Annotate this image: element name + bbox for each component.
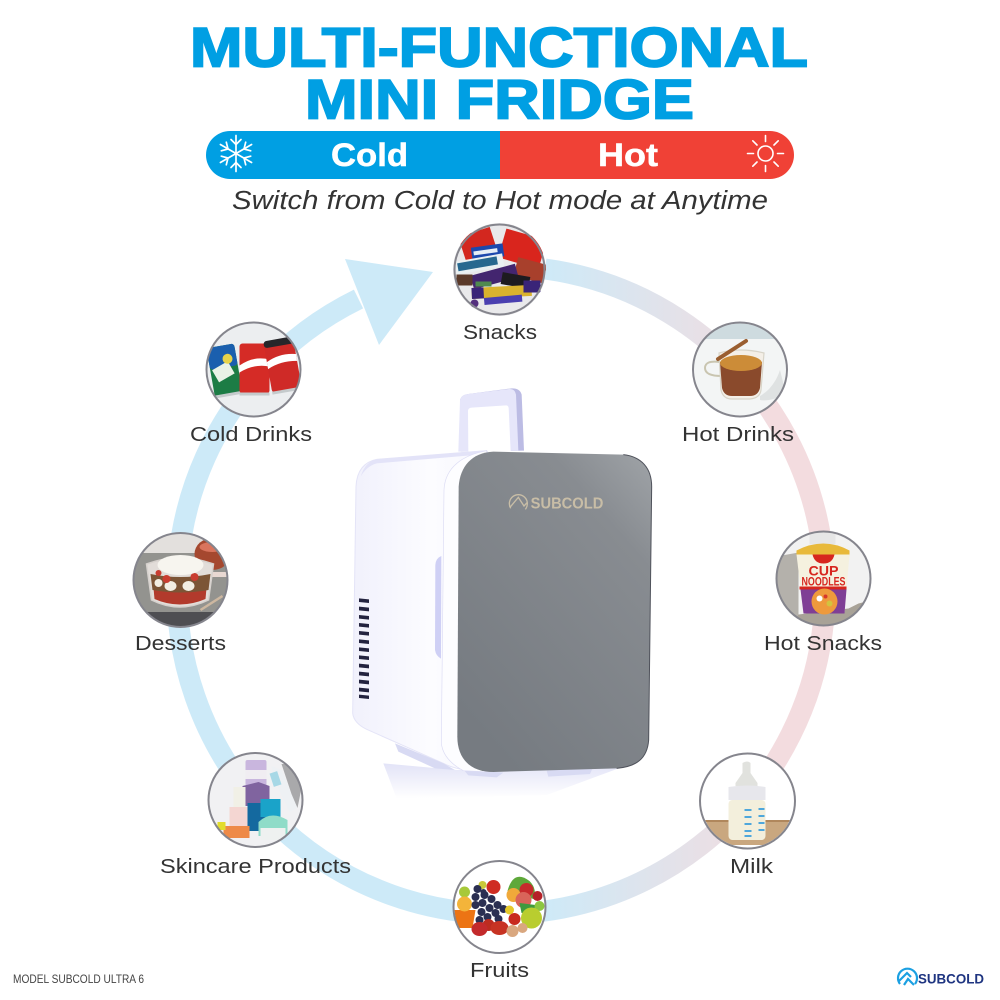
item: fruits [452,860,546,982]
skincare photo [208,753,302,847]
subtitle: Switch from Cold to Hot mode at Anytime [232,187,768,215]
desserts ring [134,533,228,627]
snacks photo [453,223,547,316]
hot snacks photo [776,532,870,626]
item: snacks [453,223,547,344]
brand name: SUBCOLD [918,970,984,986]
mode switch pill [206,131,794,179]
hot snacks photo: CUP [809,562,838,578]
fruits ring [454,861,546,953]
title: MULTI-FUNCTIONAL [190,16,808,78]
title: MINI FRIDGE [305,68,694,130]
hot snacks label: Hot Snacks [764,633,882,655]
cold drinks ring [206,322,300,416]
hot snacks photo: NOODLES [802,574,846,588]
door logo: SUBCOLD [531,495,603,512]
item: milk [700,753,796,878]
snacks ring [454,224,544,314]
door edge [617,455,652,768]
icon: sun [748,136,784,172]
desserts label: Desserts [135,633,226,655]
milk ring [700,754,795,848]
cold drinks label: Cold Drinks [190,424,312,446]
skincare label: Skincare Products [160,856,351,878]
hot drinks label: Hot Drinks [682,424,794,446]
fruits label: Fruits [470,960,529,982]
hot snacks ring [776,532,870,626]
fruits photo [454,876,544,937]
item: hot drinks [682,322,794,446]
cold label: Cold [331,137,408,173]
item: cold drinks [190,322,312,446]
circular ring arrow [177,259,825,914]
hot drinks photo [693,323,787,417]
fridge handle [458,388,524,452]
hot label: Hot [598,137,658,173]
snacks label: Snacks [463,322,537,344]
item: skincare products [160,753,351,878]
item: desserts [134,533,230,655]
cold drinks photo [206,322,302,416]
icon: snowflake [220,136,252,172]
fridge [353,388,652,798]
skincare ring [208,753,302,847]
title [190,16,808,130]
model note: MODEL SUBCOLD ULTRA 6 [13,972,144,986]
milk label: Milk [730,856,774,878]
hot drinks ring [693,322,787,416]
fridge front rim [441,451,490,772]
fridge reflection [383,763,623,798]
milk photo [706,758,790,845]
fridge door [457,452,652,772]
fridge feet [395,743,593,777]
desserts photo [134,533,230,627]
icon: mountain logo [898,969,917,985]
brand logo [898,969,984,986]
vents [359,598,369,699]
side grip [435,556,441,659]
item: hot snacks [764,532,882,655]
fridge body [353,451,507,772]
